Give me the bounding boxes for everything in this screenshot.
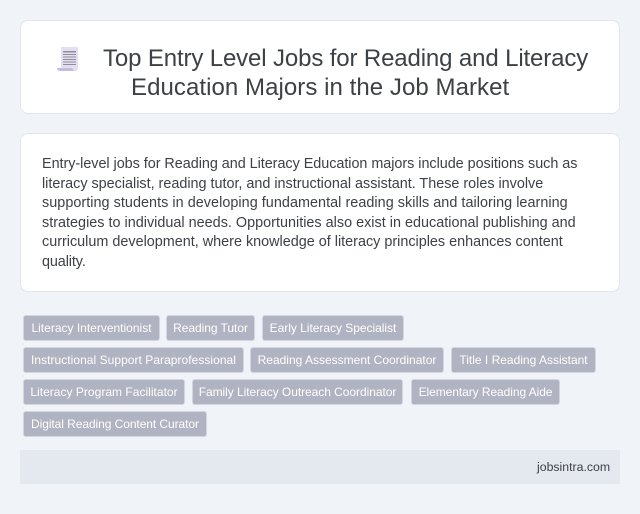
header panel [20,20,620,114]
tag [192,379,403,405]
tag [451,347,596,373]
tag: Family Literacy Outreach Coordinator [199,385,396,399]
tag: Early Literacy Specialist [270,321,396,335]
footer bar [20,450,620,484]
description text: quality. [42,254,86,270]
tags [23,315,596,437]
text: Education Majors in the Job Market [131,74,509,101]
description text: supporting students in developing fundamental reading skills and tailoring learning [42,195,568,211]
tag [23,379,185,405]
tag [23,315,160,341]
tag [411,379,560,405]
title [103,45,588,101]
tag [23,347,244,373]
description text [42,156,577,270]
tag: Reading Assessment Coordinator [258,353,436,367]
tag: Digital Reading Content Curator [31,417,199,431]
icon: document scroll [57,47,78,71]
tag: Literacy Program Facilitator [30,385,178,399]
tag [262,315,404,341]
tag: Instructional Support Paraprofessional [31,353,236,367]
tag: Literacy Interventionist [31,321,152,335]
footer text: jobsintra.com [537,460,610,474]
description text: literacy specialist, reading tutor, and instructional assistant. These roles involve [42,176,543,192]
tag: Reading Tutor [173,321,248,335]
tag [23,411,207,437]
description panel [20,133,620,292]
text: Top Entry Level Jobs for Reading and Literacy [103,45,588,72]
description text: curriculum development, where knowledge of literacy principles enhances content [42,234,563,250]
description text: strategies to individual needs. Opportunities also exist in educational publishing and [42,215,576,231]
tag: Elementary Reading Aide [419,385,552,399]
tag: Title I Reading Assistant [459,353,588,367]
tag [250,347,444,373]
description text: Entry-level jobs for Reading and Literacy Education majors include positions such as [42,156,577,172]
tag [166,315,255,341]
